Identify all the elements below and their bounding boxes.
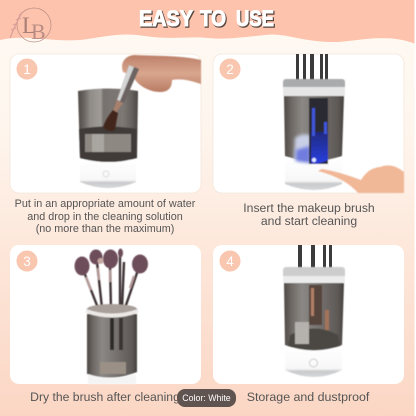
header wave band bbox=[0, 0, 416, 44]
right edge strip bbox=[414, 0, 416, 416]
title bbox=[139, 6, 275, 32]
step badge 1: 1 bbox=[23, 62, 31, 77]
title: EASY bbox=[140, 7, 194, 32]
device: running with blue light bbox=[283, 79, 345, 190]
logo bbox=[10, 8, 51, 44]
caption 4: Storage and dustproof bbox=[247, 390, 370, 404]
caption 1: (no more than the maximum) bbox=[36, 223, 174, 235]
panel 2: start cleaning bbox=[213, 54, 404, 193]
step badge 3: 3 bbox=[23, 254, 31, 269]
step badge 2 bbox=[220, 58, 240, 80]
logo: B bbox=[31, 19, 46, 44]
title: USE bbox=[236, 6, 274, 31]
caption 1: Put in an appropriate amount of water bbox=[15, 198, 196, 210]
step badge 1 bbox=[16, 58, 38, 80]
caption 2: and start cleaning bbox=[261, 214, 357, 228]
brush handles bbox=[296, 54, 328, 84]
color badge bbox=[177, 389, 236, 407]
logo: L bbox=[22, 13, 36, 38]
caption 2 bbox=[243, 201, 375, 228]
step badge 4: 4 bbox=[226, 254, 234, 269]
finger pressing button bbox=[318, 165, 404, 193]
brushes bbox=[74, 248, 148, 310]
panel 4: storage bbox=[213, 245, 404, 384]
title: USE bbox=[237, 7, 275, 32]
makeup brush bbox=[103, 65, 139, 131]
caption 3: Dry the brush after cleaning bbox=[30, 390, 180, 404]
caption 2: Insert the makeup brush bbox=[243, 201, 375, 215]
panel 1: add water bbox=[10, 54, 201, 193]
step badge 3 bbox=[16, 250, 38, 272]
title: TO bbox=[201, 7, 227, 32]
hand bbox=[122, 55, 201, 92]
brush handles bbox=[298, 245, 332, 271]
device: cup with water bbox=[78, 88, 138, 188]
caption 1: and drop in the cleaning solution bbox=[27, 211, 183, 223]
panel 3: dry brushes bbox=[10, 245, 201, 384]
title: EASY bbox=[139, 6, 193, 31]
step badge 2: 2 bbox=[226, 62, 234, 77]
step badge 4 bbox=[220, 250, 240, 272]
caption 1 bbox=[15, 198, 196, 235]
device: glass cup bbox=[86, 304, 138, 384]
color badge: Color: White bbox=[182, 393, 231, 403]
title: TO bbox=[200, 6, 226, 31]
device: closed with lid bbox=[283, 267, 345, 377]
